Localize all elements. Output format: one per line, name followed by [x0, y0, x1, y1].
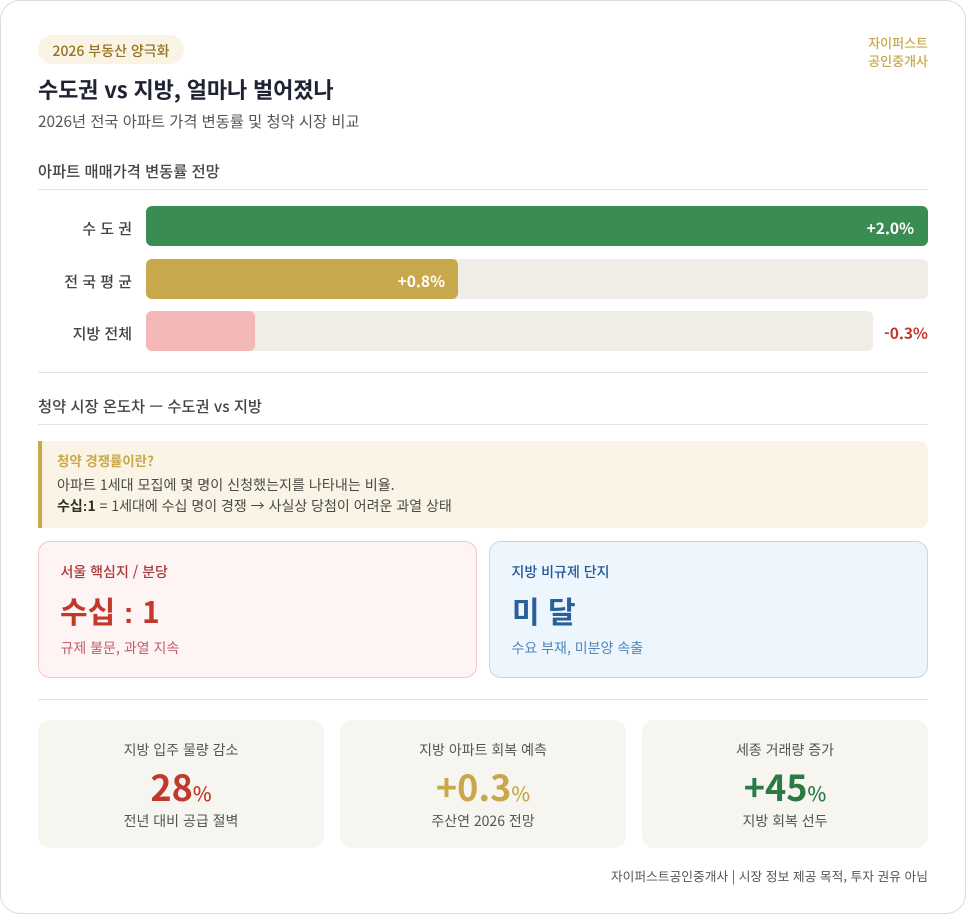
bar row: capital area: 수 도 권: [82, 218, 132, 239]
footer note: 자이퍼스트공인중개사 | 시장 정보 제공 목적, 투자 권유 아님: [611, 866, 928, 885]
stat card: Sejong transactions: 지방 회복 선두: [742, 811, 828, 831]
section heading: price change: 아파트 매매가격 변동률 전망: [38, 160, 220, 182]
stat card: Sejong transactions: 세종 거래량 증가: [736, 740, 834, 760]
bar row: national average: +0.8%: [398, 270, 445, 292]
panel: Seoul core: 서울 핵심지 / 분당: [60, 562, 168, 582]
bar row: capital area: +2.0%: [867, 217, 914, 239]
header badge: 2026 부동산 양극화: [52, 40, 170, 60]
bar row: provinces: [73, 311, 928, 351]
panel: provincial unregulated: 미 달: [512, 588, 576, 632]
bar row: provinces: 지방 전체: [73, 323, 132, 344]
callout: competition ratio explanation: 아파트 1세대 모집에 몇 명이 신청했는지를 나타내는 비율.: [57, 475, 395, 495]
subtitle: 2026년 전국 아파트 가격 변동률 및 청약 시장 비교: [38, 110, 360, 132]
callout: competition ratio explanation: 수십:1 = 1세대에 수십 명이 경쟁 → 사실상 당첨이 어려운 과열 상태: [57, 496, 452, 516]
brand label: 자이퍼스트: [868, 32, 928, 52]
panel: Seoul core: [38, 541, 477, 678]
bar chart: price change: [64, 206, 928, 351]
stat card: supply decrease: 28%: [150, 760, 212, 812]
panel: provincial unregulated: [489, 541, 928, 678]
bar row: capital area: [82, 206, 928, 246]
brand label: 공인중개사: [868, 51, 928, 70]
stat card: recovery forecast: [340, 720, 626, 848]
stat card: recovery forecast: 주산연 2026 전망: [431, 811, 535, 831]
bar row: national average: [64, 259, 928, 299]
section heading: subscription market: 청약 시장 온도차 — 수도권 vs 지방: [38, 395, 262, 417]
stat card: supply decrease: 전년 대비 공급 절벽: [124, 811, 238, 831]
callout: competition ratio explanation: 청약 경쟁률이란?: [57, 450, 154, 470]
panel: Seoul core: 규제 불문, 과열 지속: [60, 638, 179, 658]
bar row: provinces: -0.3%: [884, 322, 928, 344]
stat card: Sejong transactions: +45%: [744, 760, 826, 812]
brand label: [868, 32, 928, 70]
title: 수도권 vs 지방, 얼마나 벌어졌나: [38, 73, 333, 105]
panel: provincial unregulated: 지방 비규제 단지: [512, 562, 610, 582]
bar row: national average: 전 국 평 균: [64, 271, 132, 292]
header badge: [38, 35, 184, 64]
callout: competition ratio explanation: [38, 441, 928, 528]
stat card: supply decrease: [38, 720, 324, 848]
stat card: supply decrease: 지방 입주 물량 감소: [124, 740, 238, 760]
panel: Seoul core: 수십 : 1: [60, 588, 160, 632]
panel: provincial unregulated: 수요 부재, 미분양 속출: [512, 638, 643, 658]
stat card: Sejong transactions: [642, 720, 928, 848]
stat card: recovery forecast: +0.3%: [436, 760, 530, 812]
stat card: recovery forecast: 지방 아파트 회복 예측: [419, 740, 547, 760]
